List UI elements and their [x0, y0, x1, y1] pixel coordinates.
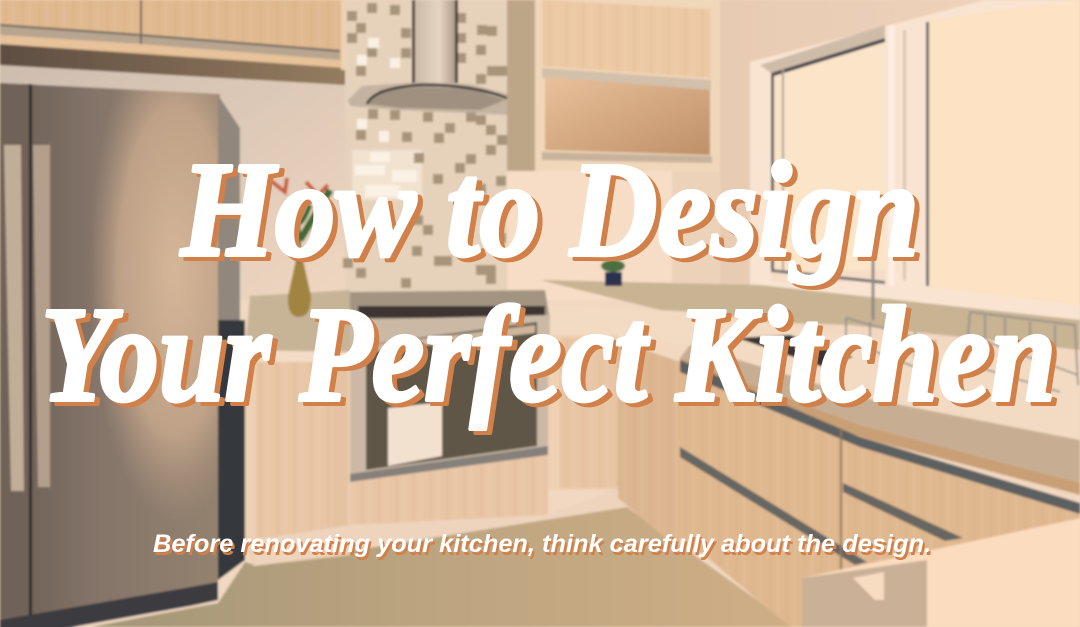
potted plant — [601, 260, 625, 286]
floor — [90, 507, 795, 627]
range hood — [348, 0, 531, 115]
lower cabinets — [253, 335, 1080, 627]
upper right cabinet — [507, 0, 720, 171]
upper left cabinets — [0, 0, 348, 85]
backsplash — [343, 0, 507, 295]
light mosaic tiles — [355, 38, 417, 197]
title line 1: How to Design — [185, 139, 924, 289]
title — [41, 135, 1061, 434]
faucet — [862, 236, 873, 320]
window — [750, 0, 1080, 320]
dish rack — [846, 312, 1078, 392]
refrigerator — [0, 83, 240, 627]
stove and oven — [350, 290, 550, 525]
darker mosaic tiles — [343, 3, 507, 288]
vase with flowers — [270, 178, 330, 317]
title line 1: How to Design — [180, 135, 919, 285]
subtitle: Before renovating your kitchen, think carefully about the design. — [155, 533, 933, 561]
foreground granite counter — [802, 518, 1080, 627]
sink — [737, 335, 853, 367]
countertop — [245, 280, 1080, 495]
dark gap beside fridge — [218, 320, 245, 580]
lower left cabinet — [245, 355, 350, 566]
subtitle: Before renovating your kitchen, think carefully about the design. — [153, 530, 931, 558]
